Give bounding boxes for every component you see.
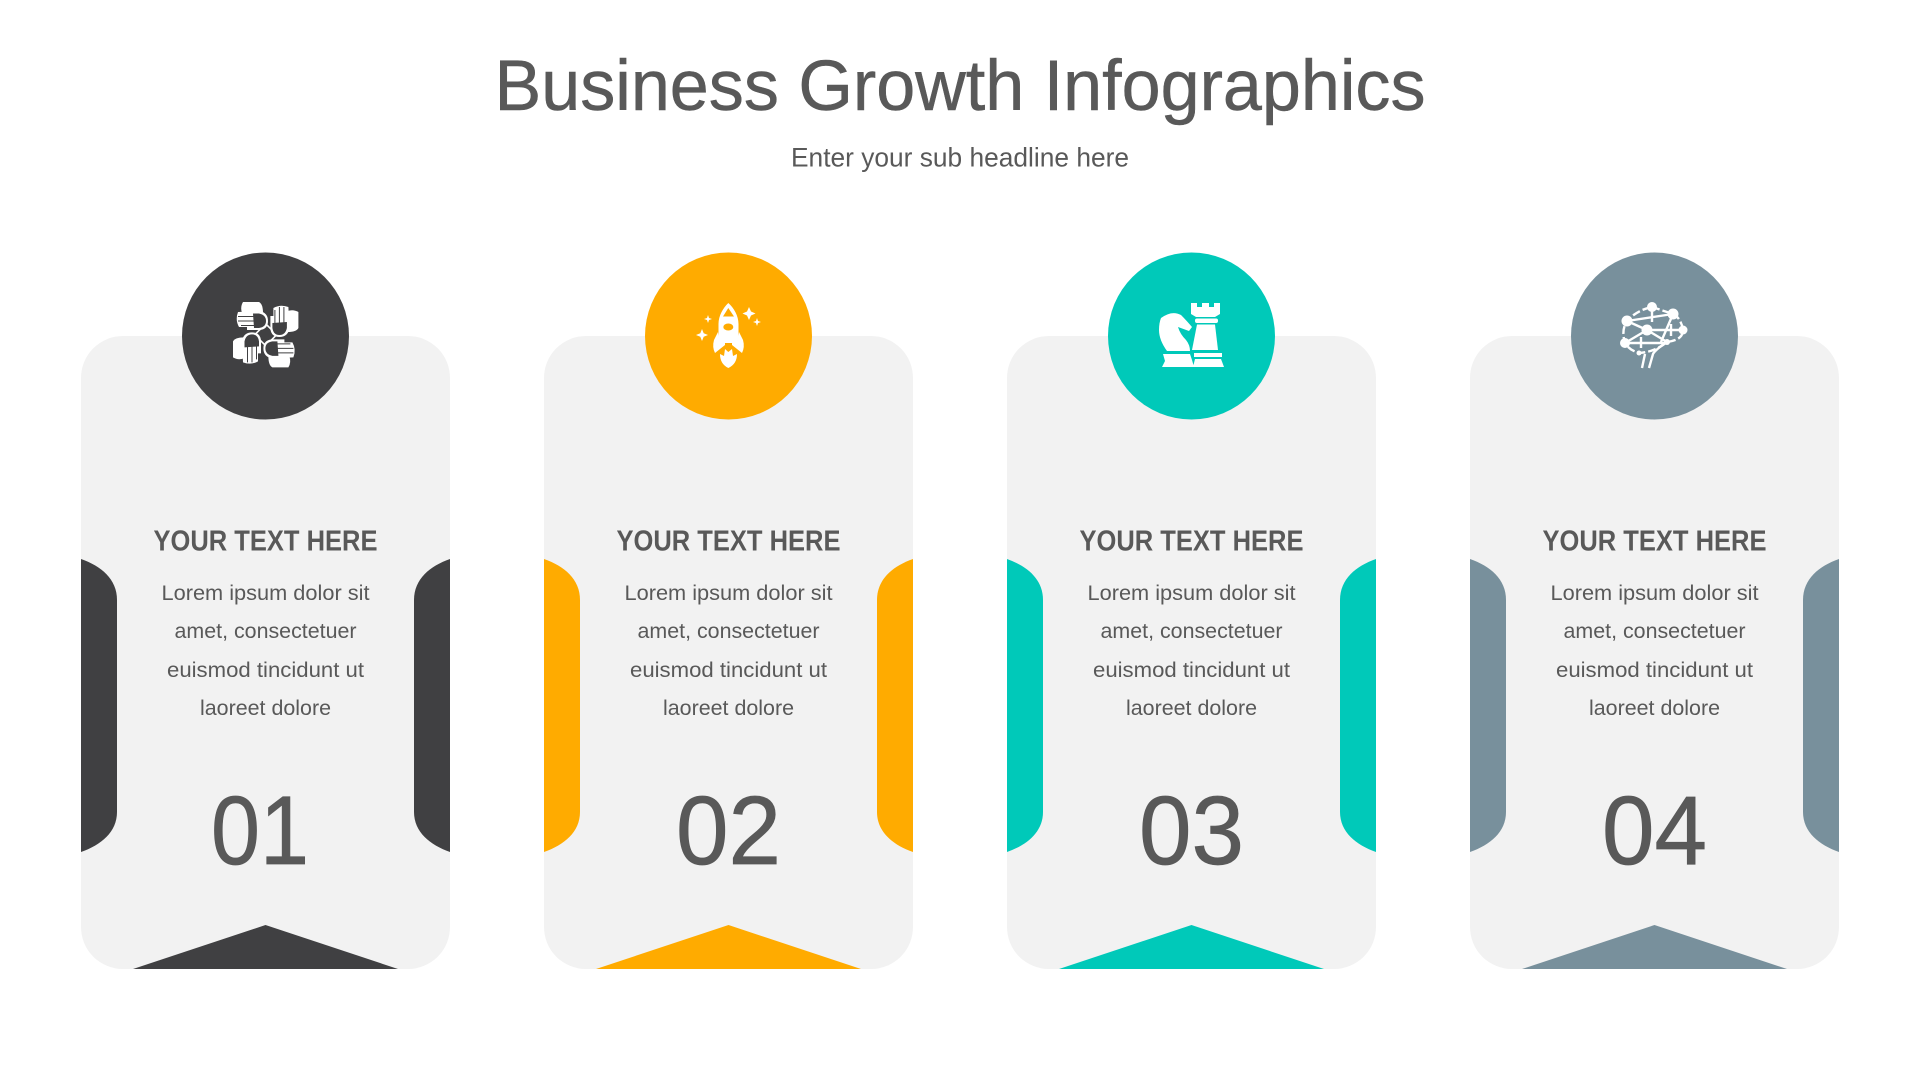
title: Business Growth Infographics [494,47,1426,126]
step number: 01 [211,776,309,885]
card body text [162,582,370,720]
left side tab [544,559,580,852]
card body text: Lorem ipsum dolor sit [624,582,833,605]
card body text: euismod tincidunt ut [630,659,827,682]
panel: card 04 [1470,252,1839,969]
card body text: euismod tincidunt ut [167,659,364,682]
step number: 03 [1139,776,1244,885]
step number: 02 [676,776,781,885]
card body text: laoreet dolore [1589,697,1720,720]
card body text: euismod tincidunt ut [1556,659,1753,682]
card body text: amet, consectetuer [638,620,820,643]
card background [81,336,450,969]
card background [1007,336,1376,969]
icon circle [1108,252,1275,420]
icon circle [1571,252,1738,420]
card background [1470,336,1839,969]
subtitle: Enter your sub headline here [791,142,1129,172]
card body text: amet, consectetuer [1100,620,1283,643]
left side tab [81,559,117,852]
card body text: laoreet dolore [663,697,794,720]
card body text: laoreet dolore [200,697,331,720]
bottom chevron [1059,925,1324,969]
panel: card 03 [1007,252,1376,969]
left side tab [1470,559,1506,852]
right side tab [414,559,450,852]
card body text: amet, consectetuer [174,620,357,643]
bottom chevron [1522,925,1787,969]
right side tab [1803,559,1839,852]
step number: 04 [1602,776,1707,885]
card heading: YOUR TEXT HERE [1542,526,1766,558]
icon circle [645,252,812,420]
icon: chess knight and rook [1159,303,1224,367]
icon circle [182,252,349,420]
icon: brain network [1620,302,1688,368]
card heading: YOUR TEXT HERE [616,526,840,558]
card body text [1088,582,1296,720]
card body text: Lorem ipsum dolor sit [1088,582,1296,605]
right side tab [877,559,913,852]
left side tab [1007,559,1043,852]
right side tab [1340,559,1376,852]
card heading: YOUR TEXT HERE [154,526,378,558]
card body text: euismod tincidunt ut [1093,659,1290,682]
card heading: YOUR TEXT HERE [1080,526,1304,558]
card background [544,336,913,969]
icon: four joined hands [233,302,298,367]
card body text: laoreet dolore [1126,697,1257,720]
bottom chevron [596,925,861,969]
panel: card 01 [81,252,450,969]
card body text: amet, consectetuer [1564,620,1746,643]
bottom chevron [133,925,398,969]
card body text [624,582,833,720]
card body text: Lorem ipsum dolor sit [1550,582,1759,605]
icon: rocket [696,303,761,368]
card body text: Lorem ipsum dolor sit [162,582,370,605]
card body text [1550,582,1759,720]
panel: card 02 [544,252,913,969]
